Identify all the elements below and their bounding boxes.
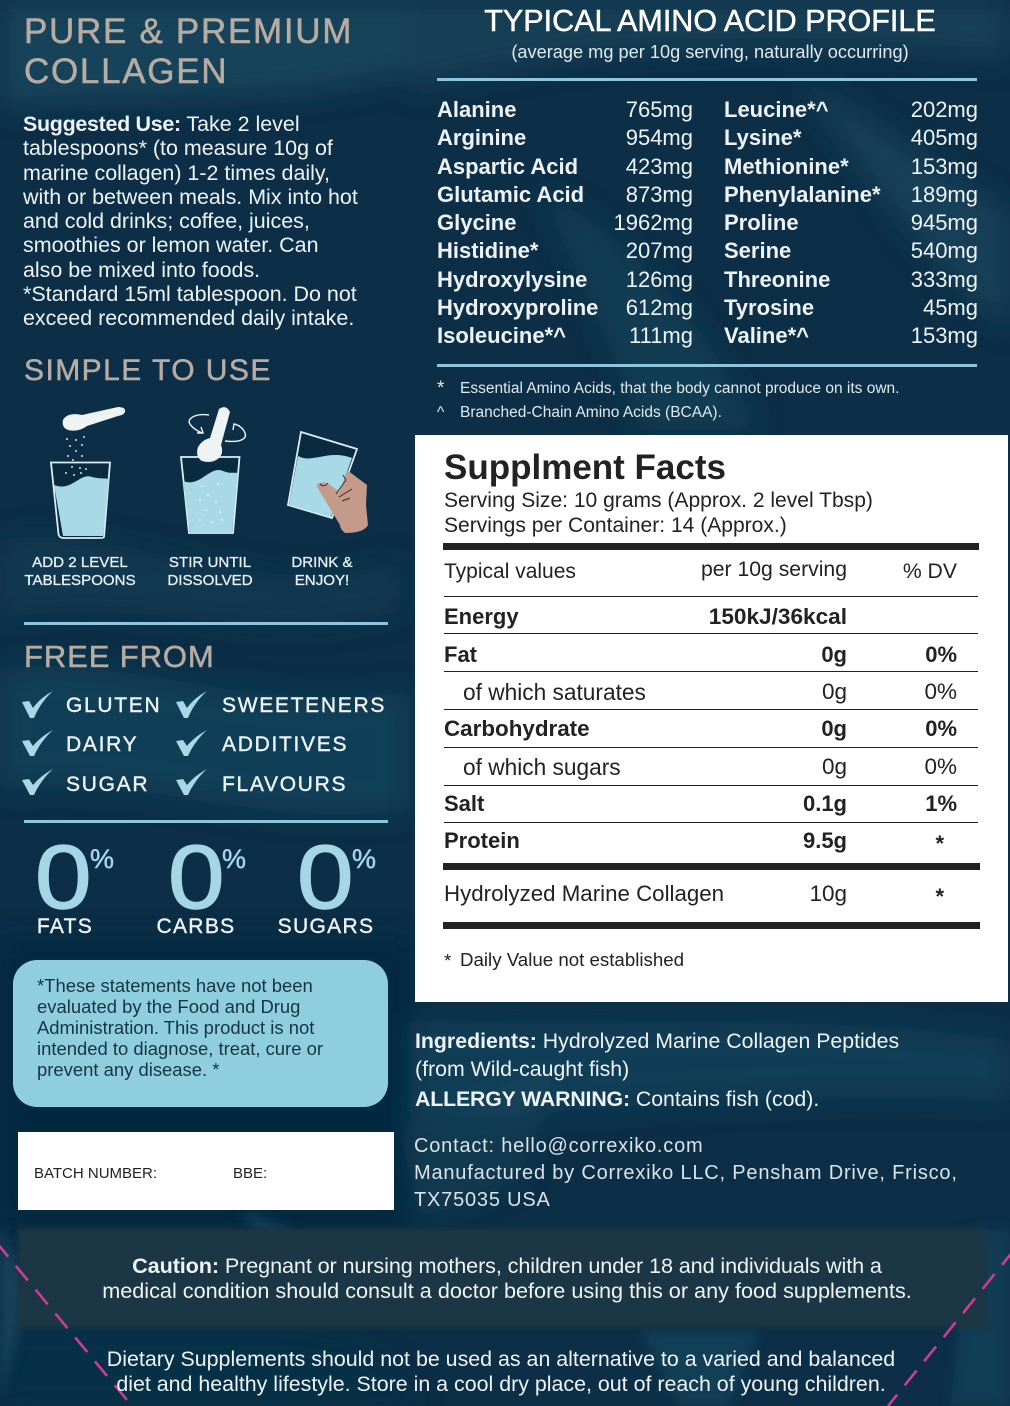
panel: supplement facts <box>415 435 1008 1002</box>
text: serving info: Serving Size: 10 grams (Approx. 2 level Tbsp) <box>444 489 873 512</box>
text block: suggested use: exceed recommended daily intake. <box>23 306 354 330</box>
table: amino acids: 126mg <box>626 266 693 292</box>
heading: pure and premium collagen: PURE & PREMIUM <box>24 12 353 51</box>
caption: drink and enjoy: ENJOY! <box>295 572 349 589</box>
table: supplement rows: 0g <box>822 679 847 704</box>
table: amino acids: Glycine <box>437 210 516 235</box>
text block: suggested use: smoothies or lemon water. Can <box>23 233 318 257</box>
list: free from items: ADDITIVES <box>222 733 348 756</box>
table: amino acids: Leucine*^ <box>724 97 829 122</box>
text block: suggested use: tablespoons* (to measure 10g of <box>23 136 333 160</box>
table: amino acids: 153mg <box>911 154 978 178</box>
panel: batch number box: BATCH NUMBER: <box>34 1165 157 1182</box>
caption: drink and enjoy: DRINK & <box>291 554 353 571</box>
stat: zero percent carbs: % <box>222 844 246 874</box>
table: amino acids: 423mg <box>626 154 693 178</box>
list: free from items <box>22 691 386 796</box>
table: supplement rows: 0g <box>821 642 847 667</box>
table: amino acids: Alanine <box>437 97 516 122</box>
table: supplement rows: * <box>935 884 944 909</box>
table: amino acids: Methionine* <box>724 154 849 178</box>
table: supplement rows: 0g <box>822 754 847 779</box>
text block: suggested use: *Standard 15ml tablespoon. Do not <box>23 282 357 306</box>
table: amino acids: Arginine <box>437 125 526 150</box>
table: amino acids: 1962mg <box>613 210 693 235</box>
callout: FDA disclaimer: Administration. This product is not <box>37 1017 314 1038</box>
table: supplement rows: Energy <box>444 604 519 629</box>
table: supplement rows <box>443 558 980 929</box>
stat: zero percent carbs: CARBS <box>156 915 236 938</box>
table: amino acids: 765mg <box>626 97 693 122</box>
table: amino acids: 405mg <box>911 125 978 150</box>
table: amino acids <box>437 97 978 348</box>
stat: zero percent sugars: % <box>352 844 376 874</box>
table: supplement rows: Protein <box>444 828 520 853</box>
text block: suggested use: with or between meals. Mix into hot <box>23 185 358 209</box>
stat: zero percent sugars <box>278 828 376 938</box>
stat: zero percent fats: FATS <box>37 915 93 938</box>
footnote: essential amino acids: * <box>437 378 444 399</box>
panel: batch number box <box>18 1132 394 1210</box>
table: supplement rows: 0% <box>924 679 957 704</box>
table: amino acids: 954mg <box>626 125 693 150</box>
stat: zero percent sugars: SUGARS <box>278 915 374 938</box>
table: supplement rows: 0% <box>924 754 957 779</box>
table: supplement rows: % DV <box>903 560 957 583</box>
text block: contact: TX75035 USA <box>414 1189 551 1211</box>
stat: zero percent carbs: 0 <box>168 828 225 928</box>
table: supplement rows: 0.1g <box>803 791 847 816</box>
caption: add 2 level tablespoons <box>24 554 136 589</box>
callout: FDA disclaimer: intended to diagnose, treat, cure or <box>37 1038 323 1059</box>
table: supplement rows: Carbohydrate <box>444 716 590 741</box>
heading: free from: FREE FROM <box>24 639 215 674</box>
list: free from items: SUGAR <box>66 773 149 796</box>
heading: simple to use: SIMPLE TO USE <box>24 354 272 387</box>
table: supplement rows: * <box>935 831 944 856</box>
table: amino acids: Proline <box>724 210 799 235</box>
table: supplement rows: Salt <box>444 791 484 816</box>
table: supplement rows: 10g <box>809 881 847 906</box>
text block: dietary advice: Dietary Supplements should not be used as an alternative to a varied and balanced <box>107 1347 895 1371</box>
list: free from items: GLUTEN <box>66 694 161 717</box>
text block: caution <box>102 1253 912 1302</box>
text block: dietary advice <box>107 1347 895 1396</box>
list: free from items: FLAVOURS <box>222 773 347 796</box>
callout: FDA disclaimer: prevent any disease. * <box>37 1059 219 1080</box>
table: amino acids: 189mg <box>911 182 978 207</box>
subheading: amino acid serving: (average mg per 10g serving, naturally occurring) <box>511 42 909 62</box>
text: serving info: Servings per Container: 14 (Approx.) <box>444 514 787 536</box>
table: amino acids: Hydroxyproline <box>437 295 598 320</box>
table: supplement rows: Typical values <box>444 560 576 583</box>
panel: caution band <box>20 1231 984 1325</box>
caption: drink and enjoy <box>291 554 353 589</box>
table: amino acids: Aspartic Acid <box>437 154 578 178</box>
table: supplement rows: 1% <box>925 791 957 816</box>
heading: amino acid profile: TYPICAL AMINO ACID PROFILE <box>484 4 936 38</box>
table: supplement rows: 0% <box>925 716 957 741</box>
text block: dietary advice: diet and healthy lifestyle. Store in a cool dry place, out of reach of young children. <box>116 1372 886 1396</box>
icon: add powder to glass <box>50 407 126 539</box>
table: supplement rows: 0g <box>821 716 847 741</box>
table: amino acids: 873mg <box>626 182 693 207</box>
table: amino acids: Histidine* <box>437 238 538 263</box>
table: amino acids: 612mg <box>626 295 693 320</box>
table: amino acids: 945mg <box>911 210 978 235</box>
table: amino acids: Tyrosine <box>724 295 814 320</box>
text block: ingredients: Ingredients: Hydrolyzed Marine Collagen Peptides <box>415 1029 899 1053</box>
list: free from items: DAIRY <box>66 733 138 756</box>
footnote: daily value: Daily Value not established <box>460 949 684 970</box>
table: supplement rows: 150kJ/36kcal <box>709 604 847 629</box>
text block: ingredients <box>415 1029 899 1080</box>
icon: hand holding glass <box>287 430 368 533</box>
stat: zero percent carbs <box>156 828 246 938</box>
list: free from items: SWEETENERS <box>222 694 386 717</box>
text block: contact <box>414 1135 958 1211</box>
table: amino acids: Valine*^ <box>724 323 809 348</box>
heading: pure and premium collagen: COLLAGEN <box>24 52 228 90</box>
footnote: branched chain: Branched-Chain Amino Acids (BCAA). <box>460 404 722 421</box>
caption: add 2 level tablespoons: ADD 2 LEVEL <box>32 554 128 571</box>
panel: batch number box: BBE: <box>233 1165 267 1182</box>
table: amino acids: Serine <box>724 238 791 263</box>
footnote: branched chain: ^ <box>437 404 444 421</box>
text block: caution: Caution: Pregnant or nursing mothers, children under 18 and individuals with a <box>132 1253 882 1278</box>
table: amino acids: 45mg <box>923 295 978 320</box>
text block: suggested use: also be mixed into foods. <box>23 258 260 282</box>
stat: zero percent fats: 0 <box>35 828 92 928</box>
icon: stir with spoon <box>180 407 246 534</box>
table: amino acids: 207mg <box>626 238 693 263</box>
text: serving info <box>444 489 873 536</box>
table: supplement rows: Fat <box>444 642 477 667</box>
callout: FDA disclaimer: evaluated by the Food and Drug <box>37 996 300 1017</box>
table: supplement rows: of which sugars <box>463 754 621 780</box>
caption: stir until dissolved: DISSOLVED <box>167 572 253 589</box>
table: amino acids: 153mg <box>911 323 978 348</box>
text block: contact: Contact: hello@correxiko.com <box>414 1135 703 1157</box>
text block: allergy warning: ALLERGY WARNING: Contains fish (cod). <box>415 1087 819 1111</box>
table: supplement rows: 9.5g <box>803 828 847 853</box>
footnote: essential amino acids: Essential Amino Acids, that the body cannot produce on its own. <box>460 380 899 397</box>
text block: suggested use: marine collagen) 1-2 times daily, <box>23 161 330 185</box>
text block: contact: Manufactured by Correxiko LLC, Pensham Drive, Frisco, <box>414 1162 958 1184</box>
stat: zero percent fats: % <box>90 844 114 874</box>
caption: stir until dissolved <box>167 554 253 589</box>
table: supplement rows: 0% <box>925 642 957 667</box>
callout: FDA disclaimer <box>13 960 388 1107</box>
table: amino acids: Hydroxylysine <box>437 266 587 292</box>
caption: stir until dissolved: STIR UNTIL <box>169 554 251 571</box>
text block: suggested use: and cold drinks; coffee, juices, <box>23 209 310 233</box>
icon: check marks <box>22 691 207 795</box>
table: supplement rows: Hydrolyzed Marine Collagen <box>444 881 724 906</box>
heading: pure and premium collagen <box>22 12 380 966</box>
text block: caution: medical condition should consult a doctor before using this or any food supplements. <box>102 1278 912 1302</box>
stat: zero percent fats <box>35 828 114 938</box>
table: amino acids: Lysine* <box>724 125 801 150</box>
table: amino acids: 111mg <box>629 323 693 348</box>
table: amino acids: 333mg <box>911 266 978 292</box>
text block: suggested use <box>23 112 358 330</box>
table: amino acids: Threonine <box>724 266 830 292</box>
table: amino acids: 202mg <box>911 97 978 122</box>
caption: add 2 level tablespoons: TABLESPOONS <box>24 572 136 589</box>
text block: ingredients: (from Wild-caught fish) <box>415 1056 629 1080</box>
table: amino acids: 540mg <box>911 238 978 263</box>
stat: zero percent sugars: 0 <box>297 828 354 928</box>
decorative dashed cut lines <box>0 1244 1010 1406</box>
heading: supplement facts: Supplment Facts <box>444 448 726 487</box>
callout: FDA disclaimer: *These statements have not been <box>37 974 313 996</box>
table: amino acids: Isoleucine*^ <box>437 323 566 348</box>
table: amino acids: Phenylalanine* <box>724 182 881 207</box>
text block: suggested use: Suggested Use: Take 2 level <box>23 112 300 136</box>
table: supplement rows: per 10g serving <box>701 558 847 581</box>
footnote: daily value: * <box>444 950 451 971</box>
table: amino acids: Glutamic Acid <box>437 182 584 207</box>
table: supplement rows: of which saturates <box>463 679 646 705</box>
